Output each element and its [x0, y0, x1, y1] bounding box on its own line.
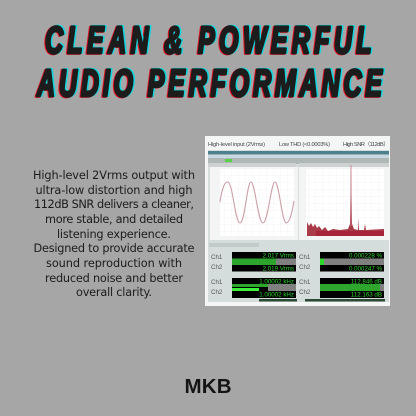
title: CLEAN & POWERFUL: [45, 19, 372, 61]
screenshot header labels: Low THD (<0.0003%): [279, 142, 330, 148]
meter: RMS level: Ch1: [211, 254, 223, 261]
title: AUDIO PERFORMANCE: [38, 61, 385, 104]
meter: SNR: [299, 278, 384, 298]
meter: SNR: Ch1: [299, 279, 311, 286]
meter: THD+N ratio: Ch1: [299, 254, 311, 261]
meter: RMS level: 2.017 Vrms: [263, 252, 294, 260]
title: [35, 18, 385, 105]
meter: Frequency: Ch1: [211, 279, 223, 286]
description text: listening experience.: [57, 228, 171, 241]
title: AUDIO PERFORMANCE: [36, 62, 383, 104]
lower meter area: [208, 240, 389, 302]
screenshot header labels: High SNR（112dB）: [343, 141, 389, 148]
description text: ultra-low distortion and high: [36, 184, 192, 197]
meter: RMS level: 2.019 Vrms: [263, 266, 294, 272]
status bar: [259, 299, 297, 302]
meter: Frequency: 1.00002 kHz: [259, 292, 294, 298]
meter: THD+N ratio: Ch2: [299, 264, 311, 271]
description text: 112dB SNR delivers a cleaner,: [34, 198, 194, 211]
meter: THD+N ratio: [299, 252, 384, 272]
meter: THD+N ratio: 0.000247 %: [349, 266, 382, 272]
description text: overall clarity.: [76, 286, 152, 299]
title: CLEAN & POWERFUL: [44, 19, 371, 62]
title: AUDIO PERFORMANCE: [35, 62, 382, 105]
meter: Frequency: [211, 278, 296, 298]
description text: sound reproduction with: [46, 257, 182, 270]
meter: RMS level: [211, 252, 296, 272]
meter: SNR: 112.163 dB: [351, 292, 382, 298]
title: CLEAN & POWERFUL: [46, 18, 373, 61]
description text: reduced noise and better: [45, 272, 183, 285]
spectrum chart: [299, 165, 389, 240]
meter: RMS level: Ch2: [211, 264, 223, 271]
brand name: MKB: [184, 375, 232, 398]
meter: SNR: 112.846 dB: [351, 278, 382, 286]
meter: SNR: Ch2: [299, 289, 311, 296]
software window: [208, 150, 389, 302]
description text: Designed to provide accurate: [34, 242, 195, 255]
meter: Frequency: 1.00002 kHz: [259, 278, 294, 286]
meter: THD+N ratio: 0.000228 %: [349, 252, 382, 260]
measurement screenshot panel: [205, 136, 390, 306]
meter: Frequency: Ch2: [211, 289, 223, 296]
screenshot header labels: High-level input (2Vrms): [208, 142, 265, 148]
waveform chart: [210, 167, 298, 240]
description text: [33, 169, 195, 299]
description text: more stable, and detailed: [45, 213, 183, 226]
screenshot header labels: [208, 141, 389, 148]
description text: High-level 2Vrms output with: [33, 169, 195, 182]
